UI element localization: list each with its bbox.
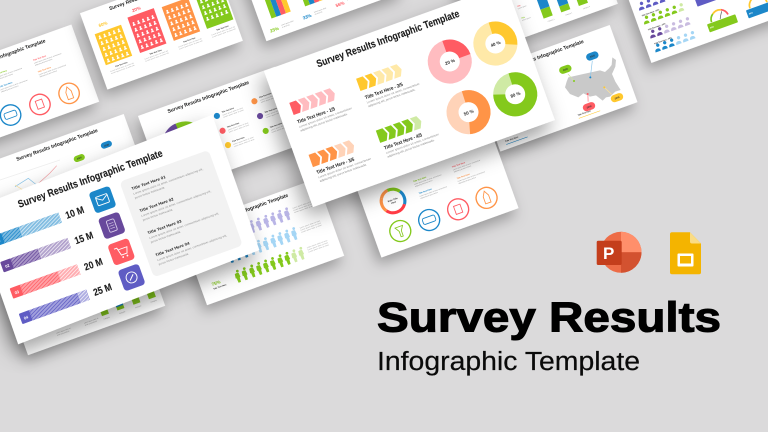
icon: PowerPoint — [597, 232, 642, 273]
panel: slide with donut and coloured dots: Lorem ipsum dolor sit amet — [233, 138, 255, 148]
bar row 3: 03 — [14, 289, 20, 295]
text block 3/5 — [316, 151, 373, 183]
text block 3/5: Lorem ipsum dolor sit amet, consectetuer — [318, 157, 372, 179]
panel: slide with coloured people columns: Title Text Here — [149, 49, 162, 56]
panel: slide with donut and coloured dots: Title Text Here — [227, 122, 240, 129]
panel: slide with coloured people columns: Lorem ipsum dolor sit amet elit — [144, 49, 169, 61]
text block 2/5 — [364, 77, 422, 108]
panel: slide with icons, left: adipiscing elit purus lectus — [1, 84, 19, 93]
panel: slide with standing people rows — [179, 179, 344, 305]
panel: text card: Lorem ipsum dolor sit amet, consectetuer adipiscing elit, — [149, 211, 220, 240]
panel: slide with line chart and pins: 2020 — [77, 157, 83, 161]
panel: slide with ring and circled icons: Lorem ipsum dolor sit amet, consectetuer — [457, 170, 486, 183]
bar row 4: 04 — [23, 314, 30, 321]
panel: slide with donut and coloured dots: Lorem ipsum dolor sit amet — [233, 136, 255, 146]
panel: text card — [119, 150, 243, 277]
panel: slide with stacked bars: Category 3 — [582, 5, 590, 10]
panel: slide with icons, left: Lorem ipsum dolor sit amet, consectetuer — [34, 52, 62, 65]
text block 4/5: Lorem ipsum dolor sit amet, consectetuer — [385, 132, 439, 155]
text block 4/5 — [383, 127, 441, 159]
text block 4/5: adipiscing elit, purus lectus malesuada. — [387, 138, 435, 159]
panel: slide with donut and coloured dots: Lorem ipsum dolor sit amet — [265, 106, 287, 117]
panel: slide with US map — [473, 25, 637, 152]
icon: Google Slides — [670, 232, 701, 274]
panel: slide with donut and coloured dots: Lorem ipsum dolor sit amet — [228, 123, 250, 134]
chevrons 2/5 — [356, 63, 404, 91]
panel: slide with donut and coloured dots: Lorem ipsum dolor sit amet — [270, 121, 292, 132]
panel: slide with coloured people columns: Lorem ipsum dolor sit amet elit — [179, 39, 203, 50]
donut 20% — [429, 41, 470, 82]
panel: slide with grouped column chart: 56% — [335, 0, 345, 8]
panel: text card: Lorem ipsum dolor sit amet, consectetuer adipiscing elit, — [157, 233, 228, 262]
panel: slide with green bars, bottom left: Category — [150, 299, 157, 304]
panel: slide with icons, left: Lorem ipsum dolor sit amet, consectetuer — [0, 78, 29, 91]
text block 1/5: Lorem ipsum dolor sit amet, consectetuer — [298, 106, 352, 129]
icon: clipboard — [98, 211, 126, 240]
panel: slide with coloured people columns: Lorem ipsum dolor sit amet elit — [211, 25, 236, 36]
panel: slide with donut and coloured dots — [138, 67, 303, 193]
panel: text card: Title Text Here 01 — [131, 174, 167, 191]
panel: slide with icons, left: Title Text Here — [33, 54, 48, 62]
panel: slide with grouped column chart: Lorem ipsum dolor — [313, 6, 327, 14]
panel: slide with ring and circled icons: adipiscing elit purus lectus — [420, 191, 439, 200]
panel: slide with coloured people columns: Title Text Here — [183, 36, 196, 44]
panel: slide with US map: Title Text Here — [577, 109, 592, 117]
panel: slide with people rows and gauges — [624, 0, 768, 63]
panel: slide with donut and coloured dots: Title Text Here — [264, 107, 277, 114]
chevrons 3/5 — [309, 139, 356, 167]
panel: slide with standing people rows: Title Text Here — [213, 283, 228, 291]
panel: slide with donut and coloured dots: Lorem ipsum dolor sit amet — [271, 124, 293, 134]
panel: slide with people rows and gauges: 80% — [749, 12, 754, 16]
icon: compass — [117, 263, 146, 292]
panel: slide with grouped column chart: 33% — [302, 13, 312, 21]
panel: slide with green bars, bottom left: Lorem ipsum dolor sit — [56, 327, 72, 335]
panel: slide with icons, left: adipiscing elit purus lectus — [39, 69, 58, 78]
text block 3/5: Title Text Here - 3/5 — [316, 157, 356, 176]
panel: slide with icons, left: adipiscing elit purus lectus — [34, 58, 53, 67]
text block 2/5: Lorem ipsum dolor sit amet, consectetuer — [366, 82, 420, 104]
main heading: Survey Results — [377, 294, 721, 341]
line chart — [0, 160, 60, 190]
donut 50% — [447, 91, 490, 133]
panel: slide with stacked bars: Title — [517, 4, 521, 8]
panel: slide with standing people rows: Lorem ipsum dolor sit amet — [292, 199, 314, 210]
chevrons 4/5 — [376, 115, 424, 143]
panel: slide with ring and circled icons: Title Text Here — [413, 175, 428, 183]
map: United States — [565, 57, 621, 101]
panel: slide with green bars, bottom left: amet consectetuer — [57, 329, 70, 337]
panel: slide with stacked bars: Category 2 — [565, 11, 573, 17]
panel: slide with ring and circled icons: Title Text Here — [418, 187, 433, 195]
panel: slide with standing people rows: Lorem ipsum dolor sit amet — [301, 223, 323, 234]
panel: text card: Lorem ipsum dolor sit amet, consectetuer adipiscing elit, — [141, 189, 212, 218]
icon: envelope — [88, 186, 117, 214]
panel: slide with ring and circled icons — [354, 131, 519, 257]
donut 50%: 50 % — [463, 109, 474, 117]
panel: slide with grouped column chart: 25% — [269, 26, 279, 34]
panel: slide with ring and circled icons: Lorem ipsum dolor sit amet, consectetuer — [419, 185, 448, 198]
panel: slide with donut and coloured dots: Title Text Here — [221, 107, 234, 114]
panel: slide with US map: 2020 — [563, 68, 569, 72]
panel: text card: Title Text Here 02 — [139, 196, 175, 213]
panel: slide with coloured people columns: 60% — [98, 20, 108, 28]
panel: slide with stacked bars: Lorem ipsum — [517, 4, 528, 10]
panel: slide with stacked bars — [453, 0, 618, 53]
bar row 4 — [19, 289, 90, 324]
panel: slide with standing people rows: Lorem ipsum dolor sit amet — [299, 219, 321, 229]
panel: slide with donut and coloured dots: Title Text Here — [259, 92, 272, 99]
slide title: Survey Results Infographic Template — [502, 39, 585, 74]
values: 25 M — [92, 282, 114, 299]
panel: slide with coloured people columns: Lorem ipsum dolor sit amet elit — [145, 51, 170, 63]
panel: slide with ring and circled icons: Here — [391, 200, 397, 205]
panel: slide with ring and circled icons: adipiscing elit purus lectus — [458, 176, 477, 185]
panel: slide with US map: 2030 — [587, 106, 593, 109]
panel: slide with green bars, bottom left — [0, 229, 165, 355]
panel: slide with US map: 2025 — [590, 55, 596, 59]
panel: slide with ring and circled icons: Lorem ipsum dolor sit amet, consectetuer — [453, 159, 481, 171]
panel: text card: Title Text Here 04 — [155, 240, 191, 257]
values: 20 M — [83, 257, 104, 273]
panel: slide with people rows and gauges: Title Text Here - 50% — [654, 36, 673, 45]
icon: PowerPoint: P — [603, 244, 614, 263]
slide title: Survey Results Infographic Template — [16, 128, 99, 163]
panel: slide with donut and coloured dots: Lorem ipsum dolor sit amet — [228, 121, 249, 131]
panel: slide with coloured people columns — [80, 0, 243, 89]
panel: slide with coloured people columns: Title Text Here — [115, 61, 128, 68]
panel: slide with donut and coloured dots: Lorem ipsum dolor sit amet — [222, 106, 244, 117]
panel: slide with donut and coloured dots: Lorem ipsum dolor sit amet — [260, 94, 282, 104]
panel: slide with coloured people columns: Title Text Here — [216, 25, 229, 32]
panel: slide with people rows and gauges: Title Text Here - 83% — [641, 8, 660, 17]
panel: slide with grouped column chart — [239, 0, 404, 41]
panel: slide with ring and circled icons: Title Text Here — [452, 161, 466, 169]
ring diagram — [378, 186, 408, 216]
panel: slide with standing people rows: 75% — [211, 279, 221, 287]
panel: slide with ring and circled icons: adipiscing elit purus lectus — [453, 164, 472, 173]
panel: slide with coloured people columns: Lorem ipsum dolor sit amet elit — [111, 64, 135, 75]
panel: slide with coloured people columns: Lorem ipsum dolor sit amet elit — [110, 61, 135, 73]
panel: slide with ring and circled icons: adipiscing elit purus lectus — [415, 179, 433, 188]
panel: slide with donut and coloured dots: Title Text Here — [269, 122, 283, 129]
panel: slide with stacked bars: Title — [521, 16, 525, 20]
panel: text card: Lorem ipsum dolor sit amet, consectetuer adipiscing elit, — [133, 167, 204, 196]
panel: slide with standing people rows: Lorem ipsum dolor sit amet — [307, 241, 329, 251]
donut 40% — [474, 22, 517, 65]
panel: slide with coloured people columns: 20% — [131, 5, 141, 13]
text block 3/5: adipiscing elit, purus lectus malesuada. — [319, 162, 368, 183]
panel: slide with standing people rows: Lorem ipsum dolor sit amet — [306, 239, 328, 249]
panel: slide with coloured people columns: Lorem ipsum dolor sit amet elit — [178, 37, 203, 48]
panel: slide with US map: Title Text Here — [505, 135, 520, 143]
panel: slide with people rows and gauges: 60% — [710, 26, 715, 30]
text block 2/5: adipiscing elit, purus lectus malesuada. — [367, 87, 416, 108]
bar row 2 — [0, 238, 71, 272]
panel: front slide with striped bars — [0, 115, 263, 344]
panel: slide with green bars, bottom left: Category — [135, 304, 142, 309]
panel: slide with donut and coloured dots: Lorem ipsum dolor sit amet — [266, 109, 288, 119]
panel: slide with grouped column chart: sit amet elit — [282, 23, 291, 29]
panel: slide with coloured people columns: Lorem ipsum dolor sit amet elit — [212, 27, 237, 39]
slide title: Survey Results Infographic Template — [206, 193, 289, 228]
chevrons 1/5 — [289, 87, 337, 115]
donut 80% — [494, 73, 536, 115]
panel: slide with stacked bars: Lorem ipsum — [522, 16, 532, 22]
donut 20%: 20 % — [444, 58, 456, 66]
panel: slide with green bars, bottom left: Category — [119, 310, 126, 315]
text block 4/5: Title Text Here - 4/5 — [383, 132, 423, 152]
bar row 2: 02 — [4, 262, 11, 269]
panel: slide with green bars, bottom left: Lorem ipsum dolor sit — [84, 317, 99, 325]
panel: slide with stacked bars: Category 1 — [547, 18, 555, 23]
panel: slide with standing people rows: Lorem ipsum dolor sit amet — [293, 202, 315, 212]
panel: slide with standing people rows: Lorem ipsum dolor sit amet — [294, 204, 316, 214]
panel: text card: purus lectus malesuada. — [150, 229, 182, 244]
panel: text card: Title Text Here 03 — [147, 218, 183, 235]
panel: text card: purus lectus malesuada. — [134, 185, 166, 200]
icon: cart — [107, 238, 135, 266]
panel: slide with icons, left — [0, 24, 99, 151]
panel: slide with line chart and pins: 2025 — [104, 144, 110, 148]
slide title: Survey Results Infographic Template — [16, 147, 164, 211]
panel: slide with donut and coloured dots: Title Text Here — [232, 136, 245, 143]
panel: slide with line chart and pins — [0, 114, 151, 241]
values — [64, 205, 114, 299]
panel: slide with standing people rows: Lorem ipsum dolor sit amet — [308, 243, 330, 253]
donut 40%: 40 % — [490, 40, 501, 48]
values: 10 M — [64, 205, 86, 222]
bar row 1 — [0, 212, 62, 247]
text block 1/5 — [296, 101, 354, 133]
panel: slide with green bars, bottom left: Category — [103, 316, 110, 321]
panel: slide with grouped column chart: Lorem ipsum dolor — [281, 19, 295, 27]
text block 1/5: Title Text Here - 1/5 — [296, 106, 336, 126]
panel: slide with icons, left: Title Text Here — [37, 66, 52, 74]
panel: slide with donut and coloured dots: Lorem ipsum dolor sit amet — [223, 108, 245, 119]
panel: slide with people rows and gauges: Title Text Here - 33% — [648, 22, 666, 31]
text block 2/5: Title Text Here - 2/5 — [364, 82, 404, 101]
panel: slide with icons, left: Lorem ipsum dolor sit amet, consectetuer — [38, 63, 67, 76]
values: 15 M — [73, 230, 95, 247]
bar row 3 — [10, 264, 81, 299]
panel: slide with ring and circled icons: Lorem ipsum dolor sit amet, consectetuer — [414, 173, 442, 186]
panel: text card: purus lectus malesuada. — [142, 207, 174, 222]
panel: slide with US map: 2035 — [615, 97, 621, 100]
panel: slide with standing people rows: Lorem ipsum dolor sit amet — [300, 221, 322, 232]
panel: text card: purus lectus malesuada. — [158, 251, 190, 266]
slide title: Survey Results Infographic Template — [167, 80, 250, 115]
panel: main slide with chevrons and donuts — [264, 0, 555, 207]
panel: slide with ring and circled icons: Title Text Here — [456, 172, 471, 180]
subheading: Infographic Template — [377, 348, 640, 376]
text block 1/5: adipiscing elit, purus lectus malesuada. — [300, 112, 348, 133]
panel: slide with green bars, bottom left: amet consectetuer — [84, 319, 98, 327]
donut 80%: 80 % — [510, 91, 521, 99]
panel: slide with grouped column chart: sit amet elit — [314, 10, 323, 16]
panel: slide with ring and circled icons: Main Title — [387, 197, 399, 203]
panel: slide with donut and coloured dots: Lorem ipsum dolor sit amet — [260, 92, 281, 102]
